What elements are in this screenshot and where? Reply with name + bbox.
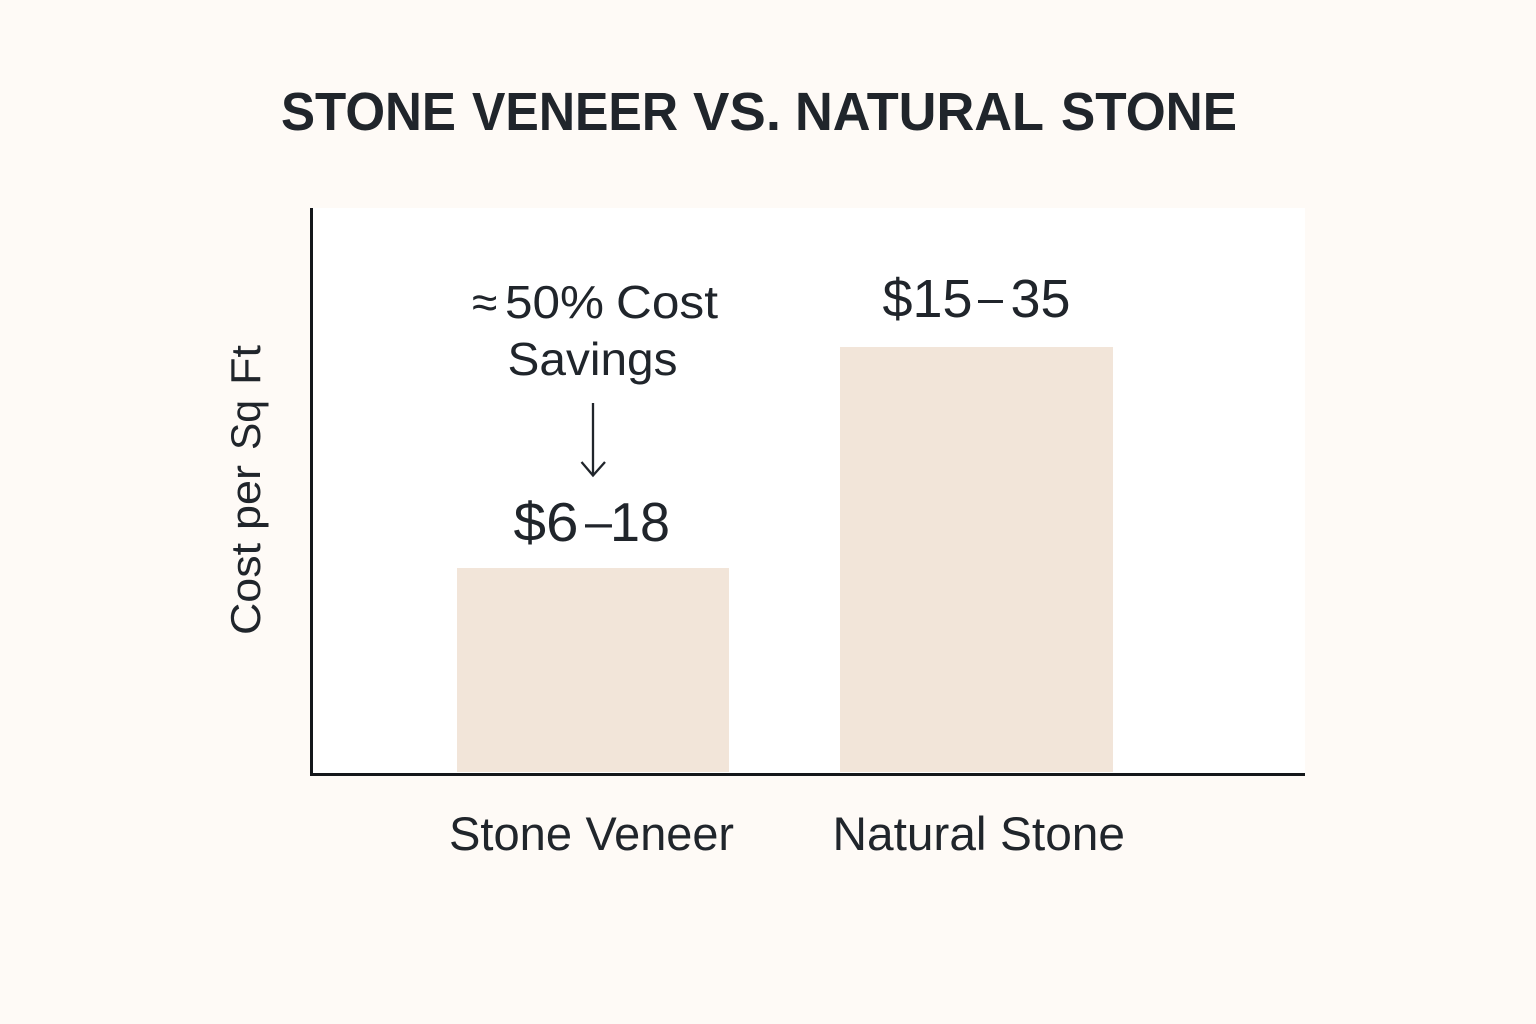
- category label: stone veneer: Veneer: [586, 807, 734, 860]
- title: VENEER: [472, 82, 678, 142]
- y axis label: [222, 345, 269, 635]
- y axis label: per: [222, 465, 269, 530]
- value: natural stone: [882, 269, 1070, 329]
- title: [281, 82, 1237, 142]
- value: stone veneer: $6: [514, 491, 578, 553]
- title: STONE: [281, 82, 456, 142]
- y axis: [310, 208, 313, 775]
- callout: cost savings: 50%: [505, 276, 604, 328]
- y axis label: Sq: [222, 400, 269, 450]
- value: stone veneer: [514, 491, 670, 553]
- bar: stone veneer: [457, 568, 729, 772]
- title: VS.: [693, 82, 781, 142]
- category label: stone veneer: Stone: [449, 807, 572, 860]
- category label: natural stone: Stone: [1000, 807, 1125, 860]
- callout: cost savings: Savings: [508, 333, 678, 385]
- arrow: down to veneer value: [582, 403, 605, 476]
- y axis label: Cost: [222, 543, 269, 635]
- category label: stone veneer: [449, 807, 734, 860]
- y axis label: Ft: [222, 345, 269, 385]
- category label: natural stone: [832, 807, 1125, 860]
- title: NATURAL: [795, 82, 1044, 142]
- callout: cost savings: Cost: [616, 276, 718, 328]
- value: natural stone: 35: [1010, 269, 1070, 329]
- value: natural stone: –: [978, 272, 1003, 323]
- value: stone veneer: 18: [610, 491, 670, 553]
- x axis: [310, 773, 1305, 776]
- callout: cost savings: [472, 276, 718, 385]
- value: stone veneer: –: [585, 496, 612, 549]
- value: natural stone: $15: [882, 269, 972, 329]
- category label: natural stone: Natural: [832, 807, 986, 860]
- bar: natural stone: [840, 347, 1113, 772]
- chart panel: [310, 208, 1305, 776]
- callout: cost savings: ≈: [472, 276, 497, 328]
- title: STONE: [1061, 82, 1237, 142]
